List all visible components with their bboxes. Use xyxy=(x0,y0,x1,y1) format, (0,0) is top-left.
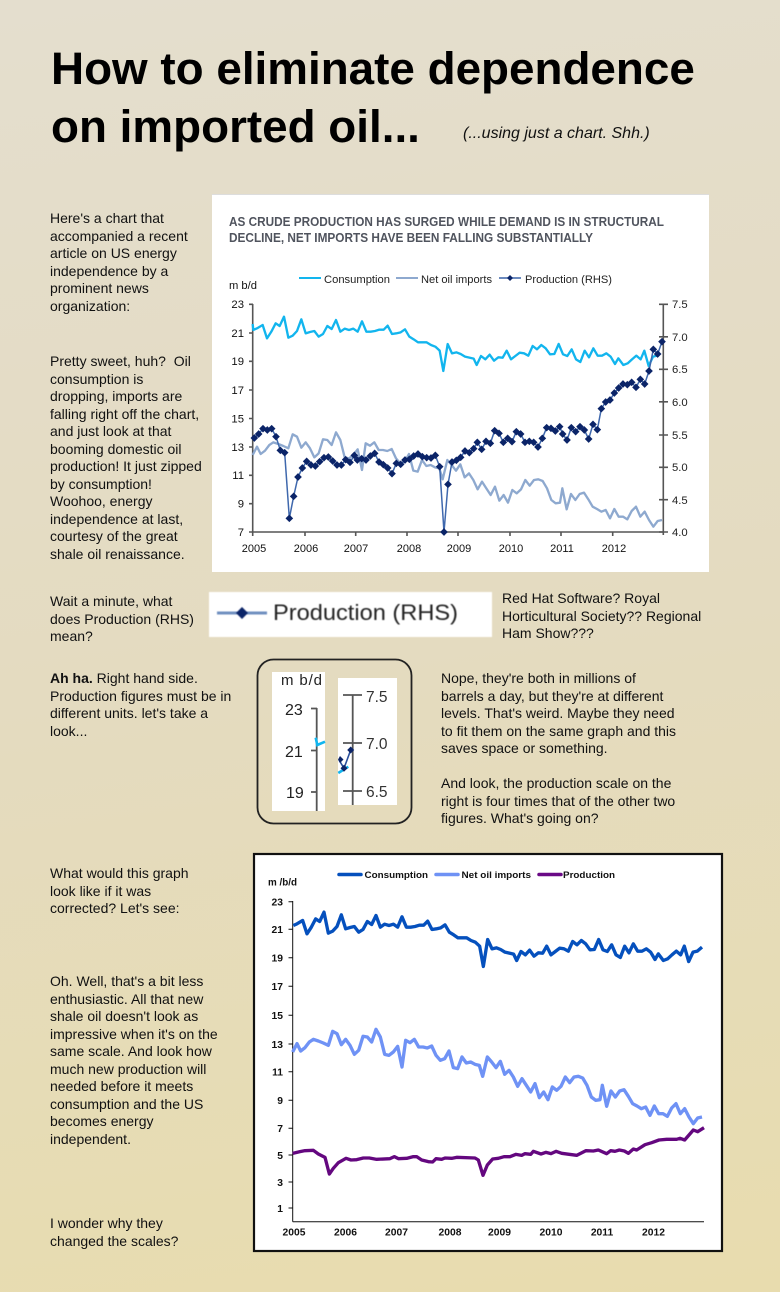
text block: scale comparison: figures. What's going on? xyxy=(441,810,599,826)
left axis xyxy=(229,280,257,539)
y axis: 11 xyxy=(272,1068,283,1078)
left axis: 21 xyxy=(231,328,244,340)
text block: corrected reaction: consumption and the US xyxy=(50,1096,203,1112)
left axis crop: 21 xyxy=(285,744,303,761)
text block: corrected reaction: impressive when it's on the xyxy=(50,1026,218,1042)
x axis xyxy=(242,532,663,555)
chart heading xyxy=(229,215,664,245)
panel: axis comparison callout xyxy=(258,660,412,824)
legend: Net oil imports xyxy=(421,274,493,286)
text block: scale comparison: to fit them on the same graph and this xyxy=(441,723,676,739)
left axis: 15 xyxy=(231,414,244,426)
text block: intro: accompanied a recent xyxy=(50,228,188,244)
text block: scale comparison: saves space or something. xyxy=(441,740,608,756)
text block: closing question: changed the scales? xyxy=(50,1233,178,1249)
text block: scale comparison: And look, the production scale on the xyxy=(441,775,671,791)
y axis: 9 xyxy=(277,1096,283,1107)
x axis: 2011 xyxy=(550,543,574,555)
text block: enthusiastic reading: independence at last, xyxy=(50,511,183,527)
legend: Production (RHS) xyxy=(525,274,612,286)
left axis: 11 xyxy=(232,470,244,482)
x axis: 2005 xyxy=(283,1228,306,1238)
left axis: 17 xyxy=(231,385,244,397)
right axis crop: 7.5 xyxy=(366,689,388,706)
y axis: 13 xyxy=(272,1040,283,1051)
text block: scale comparison: barrels a day, but they're at different xyxy=(441,688,663,704)
text block: correction prompt xyxy=(50,865,189,916)
x axis: 2009 xyxy=(488,1228,511,1238)
line: consumption xyxy=(293,912,702,966)
right axis: 4.5 xyxy=(672,495,688,507)
text block: intro: organization: xyxy=(50,298,130,314)
text block: scale comparison: right is four times that of the other two xyxy=(441,793,675,809)
x axis: 2009 xyxy=(447,543,471,555)
text block: corrected reaction: independent. xyxy=(50,1131,131,1147)
text block: corrected reaction: enthusiastic. All that new xyxy=(50,991,203,1007)
text block: right hand side xyxy=(50,670,231,739)
x axis: 2007 xyxy=(385,1228,408,1238)
x axis: 2006 xyxy=(294,543,318,555)
left axis: m b/d xyxy=(229,280,257,292)
panel: production legend crop xyxy=(209,592,492,637)
text block: RHS question: does Production (RHS) xyxy=(50,611,194,627)
y axis: 5 xyxy=(277,1151,283,1162)
title: How to eliminate dependence xyxy=(51,43,695,94)
x axis: 2010 xyxy=(540,1228,563,1238)
text block: correction prompt: What would this graph xyxy=(50,865,189,881)
text block: RHS question: mean? xyxy=(50,628,93,644)
text block: corrected reaction: Oh. Well, that's a bit less xyxy=(50,973,203,989)
text block: RHS question xyxy=(50,593,194,644)
x axis: 2008 xyxy=(439,1228,462,1238)
y axis: m /b/d xyxy=(268,878,297,888)
text block: closing question: I wonder why they xyxy=(50,1215,163,1231)
y axis: 19 xyxy=(272,954,283,964)
text block: enthusiastic reading: courtesy of the great xyxy=(50,528,178,544)
title xyxy=(51,43,695,152)
right axis: 5.5 xyxy=(672,430,688,442)
chart heading: AS CRUDE PRODUCTION HAS SURGED WHILE DEMAND IS IN STRUCTURAL xyxy=(229,215,664,229)
text block: corrected reaction: needed before it meets xyxy=(50,1078,193,1094)
y axis: 15 xyxy=(272,1011,283,1022)
text block: right hand side: Production figures must be in xyxy=(50,688,231,704)
legend: Consumption xyxy=(324,274,390,286)
text block: intro: article on US energy xyxy=(50,245,177,261)
text block: intro xyxy=(50,210,188,314)
right axis: 6.0 xyxy=(672,397,688,409)
text block: right hand side: different units. let's take a xyxy=(50,705,208,721)
legend: Production xyxy=(563,870,615,881)
line: production (RHS) xyxy=(254,342,662,532)
text block: enthusiastic reading: falling right off the chart, xyxy=(50,406,199,422)
legend xyxy=(299,274,612,286)
right axis: 7.5 xyxy=(672,299,688,311)
line: net oil imports xyxy=(253,432,662,527)
text block: enthusiastic reading: and just look at that xyxy=(50,423,171,439)
text block: enthusiastic reading: shale oil renaissance. xyxy=(50,546,185,562)
x axis: 2008 xyxy=(397,543,421,555)
text block: right hand side: look... xyxy=(50,723,87,739)
text block: closing question xyxy=(50,1215,178,1249)
text block: enthusiastic reading: booming domestic oil xyxy=(50,441,182,457)
left axis: 19 xyxy=(231,356,244,368)
text block: RHS question: Wait a minute, what xyxy=(50,593,172,609)
y axis xyxy=(268,878,297,1222)
right axis crop xyxy=(338,678,397,805)
text block: corrected reaction xyxy=(50,973,218,1147)
left axis: 9 xyxy=(238,498,244,510)
text block: enthusiastic reading: Woohoo, energy xyxy=(50,493,152,509)
right axis: 6.5 xyxy=(672,364,688,376)
y axis: 7 xyxy=(277,1124,283,1135)
text block: scale comparison xyxy=(441,670,676,826)
text block: correction prompt: corrected? Let's see: xyxy=(50,900,180,916)
x axis: 2012 xyxy=(602,543,626,555)
text block: scale comparison: levels. That's weird. Maybe they need xyxy=(441,705,675,721)
y axis: 21 xyxy=(272,925,283,936)
line: net oil imports xyxy=(293,1029,702,1124)
right axis: 5.0 xyxy=(672,462,688,474)
chart heading: DECLINE, NET IMPORTS HAVE BEEN FALLING SUBSTANTIALLY xyxy=(229,231,594,245)
line: production xyxy=(293,1128,704,1175)
legend: Net oil imports xyxy=(462,870,531,881)
left axis crop: m b/d xyxy=(281,672,322,689)
x axis: 2006 xyxy=(334,1228,357,1238)
text block: RHS jokes xyxy=(502,590,701,641)
text block: intro: prominent news xyxy=(50,280,149,296)
text block: corrected reaction: much new production will xyxy=(50,1061,206,1077)
right axis crop: 6.5 xyxy=(366,784,388,801)
text block: scale comparison: Nope, they're both in millions of xyxy=(441,670,636,686)
panel: original chart xyxy=(212,194,709,572)
left axis: 13 xyxy=(231,442,244,454)
x axis: 2005 xyxy=(242,543,266,555)
text block: enthusiastic reading: production! It just zipped xyxy=(50,458,202,474)
text block: right hand side: Ah ha. Right hand side. xyxy=(50,670,198,686)
text block: enthusiastic reading xyxy=(50,353,202,562)
text block: corrected reaction: same scale. And look how xyxy=(50,1043,212,1059)
y axis: 3 xyxy=(277,1178,283,1189)
text block: enthusiastic reading: Pretty sweet, huh? Oil xyxy=(50,353,191,369)
right axis: 7.0 xyxy=(672,332,688,344)
legend label: Production (RHS) xyxy=(273,600,458,625)
text block: enthusiastic reading: dropping, imports are xyxy=(50,388,182,404)
panel: corrected chart xyxy=(254,854,722,1251)
left axis: 23 xyxy=(231,299,244,311)
legend: Consumption xyxy=(364,870,428,881)
right axis: 4.0 xyxy=(672,527,688,539)
line: consumption xyxy=(253,317,657,371)
text block: corrected reaction: becomes energy xyxy=(50,1113,154,1129)
x axis: 2012 xyxy=(642,1228,665,1238)
text block: RHS jokes: Ham Show??? xyxy=(502,625,594,641)
x axis xyxy=(283,1222,704,1238)
text block: correction prompt: look like if it was xyxy=(50,883,151,899)
text block: RHS jokes: Horticultural Society?? Regional xyxy=(502,608,701,624)
x axis: 2007 xyxy=(344,543,368,555)
x axis: 2011 xyxy=(591,1228,613,1238)
title: on imported oil... xyxy=(51,100,420,152)
text block: intro: independence by a xyxy=(50,263,168,279)
y axis: 23 xyxy=(272,898,283,908)
y axis: 1 xyxy=(277,1204,283,1215)
text block: RHS jokes: Red Hat Software? Royal xyxy=(502,590,660,606)
text block: enthusiastic reading: consumption is xyxy=(50,371,143,387)
left axis crop xyxy=(272,672,325,811)
icon: legend line with diamond xyxy=(217,607,267,619)
right axis crop: 7.0 xyxy=(366,736,388,753)
left axis crop: 19 xyxy=(286,785,304,802)
text block: enthusiastic reading: by consumption! xyxy=(50,476,152,492)
left axis crop: 23 xyxy=(285,702,303,719)
x axis: 2010 xyxy=(499,543,523,555)
left axis: 7 xyxy=(238,527,244,539)
legend xyxy=(339,870,615,881)
subtitle: (...using just a chart. Shh.) xyxy=(463,125,650,142)
y axis: 17 xyxy=(272,982,283,993)
text block: corrected reaction: shale oil doesn't look as xyxy=(50,1008,198,1024)
text block: intro: Here's a chart that xyxy=(50,210,164,226)
right axis xyxy=(659,299,688,539)
